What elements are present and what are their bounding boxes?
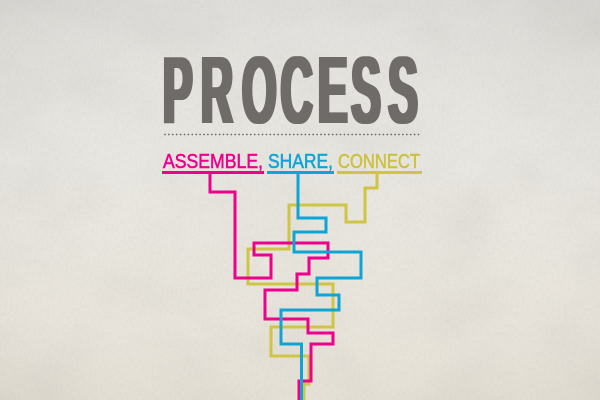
yellow connect line: [248, 172, 422, 400]
pink assemble line: [162, 172, 333, 400]
dotted divider: [165, 134, 422, 136]
process lines: [162, 172, 422, 400]
word: assemble: ASSEMBLE,: [163, 150, 263, 173]
title: PROCESS: [163, 36, 418, 144]
word: share: SHARE,: [268, 150, 333, 173]
word: connect: CONNECT: [338, 150, 420, 173]
blue share line: [267, 172, 361, 400]
subtitle: [163, 150, 420, 173]
